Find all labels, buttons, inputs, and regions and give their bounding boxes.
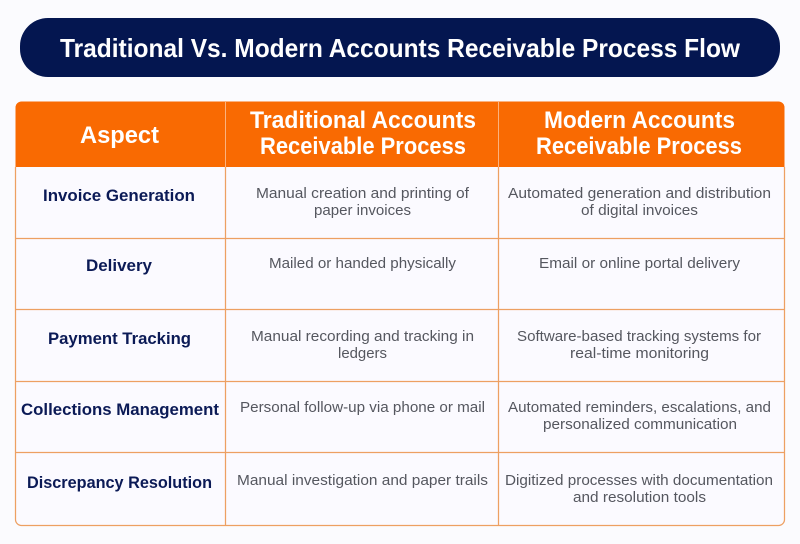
row: delivery: Delivery [86,256,153,275]
row: discrepancy resolution: and resolution tools [573,489,706,506]
row: collections management: Personal follow-up via phone or mail [240,399,485,416]
row: discrepancy resolution [27,472,773,506]
row: collections management: personalized communication [543,416,737,433]
row: invoice generation [43,185,771,219]
row: payment tracking: Manual recording and tracking in [251,328,474,345]
row: discrepancy resolution: Discrepancy Resolution [27,473,212,492]
row: invoice generation: Automated generation and distribution [508,185,771,202]
header row: Receivable Process [536,133,742,160]
row: delivery [86,255,741,275]
row: collections management: Collections Management [21,400,219,419]
row: invoice generation: Invoice Generation [43,186,195,205]
header row [16,102,784,167]
row: invoice generation: of digital invoices [581,202,698,219]
row: collections management: Automated reminders, escalations, and [508,399,771,416]
row: payment tracking: ledgers [338,345,387,362]
title [20,18,780,77]
row: payment tracking: real-time monitoring [570,345,709,362]
header row: Receivable Process [260,133,466,160]
header row: Modern Accounts [544,107,735,134]
title: Traditional Vs. Modern Accounts Receivable Process Flow [60,33,741,63]
row: collections management [21,399,771,433]
row: payment tracking: Payment Tracking [48,329,191,348]
row: invoice generation: Manual creation and printing of [256,185,470,202]
row: payment tracking [48,328,761,362]
header row: Aspect [80,122,159,149]
row: invoice generation: paper invoices [314,202,411,219]
row: discrepancy resolution: Digitized processes with documentation [505,472,773,489]
comparison table [16,102,784,526]
row: delivery: Mailed or handed physically [269,255,457,272]
row: payment tracking: Software-based tracking systems for [517,328,761,345]
row: delivery: Email or online portal delivery [539,255,741,272]
header row: Traditional Accounts [250,107,476,134]
row: discrepancy resolution: Manual investigation and paper trails [237,472,488,489]
